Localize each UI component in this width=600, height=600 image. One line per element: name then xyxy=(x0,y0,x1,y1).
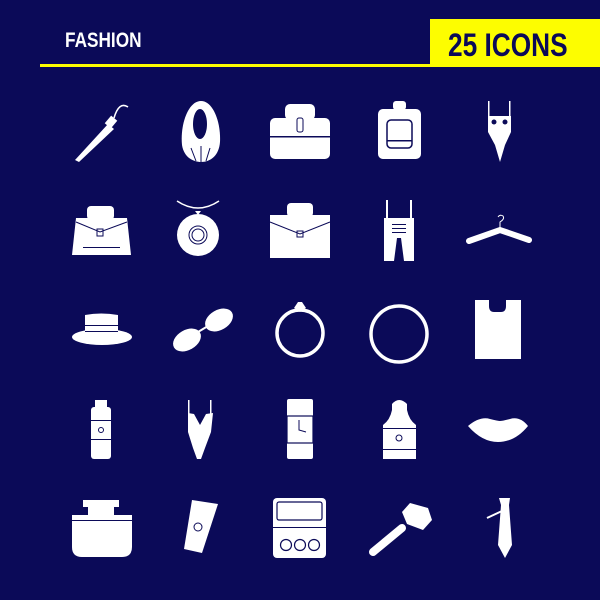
icon: lips xyxy=(468,418,528,442)
icon: palette xyxy=(273,498,326,558)
icon: watch xyxy=(287,399,313,459)
icon: jar xyxy=(72,500,132,557)
icon: umbrella xyxy=(75,105,128,162)
icon: briefcase xyxy=(270,203,330,258)
icon: luggage xyxy=(378,101,421,159)
title: FASHION xyxy=(65,29,142,52)
icon: ring xyxy=(277,302,323,356)
icon: spray bottle xyxy=(91,400,111,459)
icon: overalls xyxy=(384,200,414,261)
icon: hanger xyxy=(469,215,529,241)
icon: bag xyxy=(270,104,330,159)
badge: 25 icons xyxy=(430,19,600,67)
icon: bodysuit xyxy=(188,400,213,459)
icon: hat xyxy=(72,314,132,345)
icon: brush xyxy=(373,503,432,552)
badge: 25 icons: 25 ICONS xyxy=(448,27,568,63)
icon: glasses xyxy=(169,304,237,356)
icon: swimsuit xyxy=(488,101,511,162)
icon: tube xyxy=(184,500,218,553)
icon: bangle xyxy=(371,306,427,362)
icon: necklace xyxy=(182,101,220,162)
icon: handbag xyxy=(72,206,131,255)
icon: pendant xyxy=(177,201,219,256)
icon: tie xyxy=(487,498,512,558)
icon: tank top xyxy=(475,300,521,359)
icon: bottle xyxy=(383,400,416,459)
